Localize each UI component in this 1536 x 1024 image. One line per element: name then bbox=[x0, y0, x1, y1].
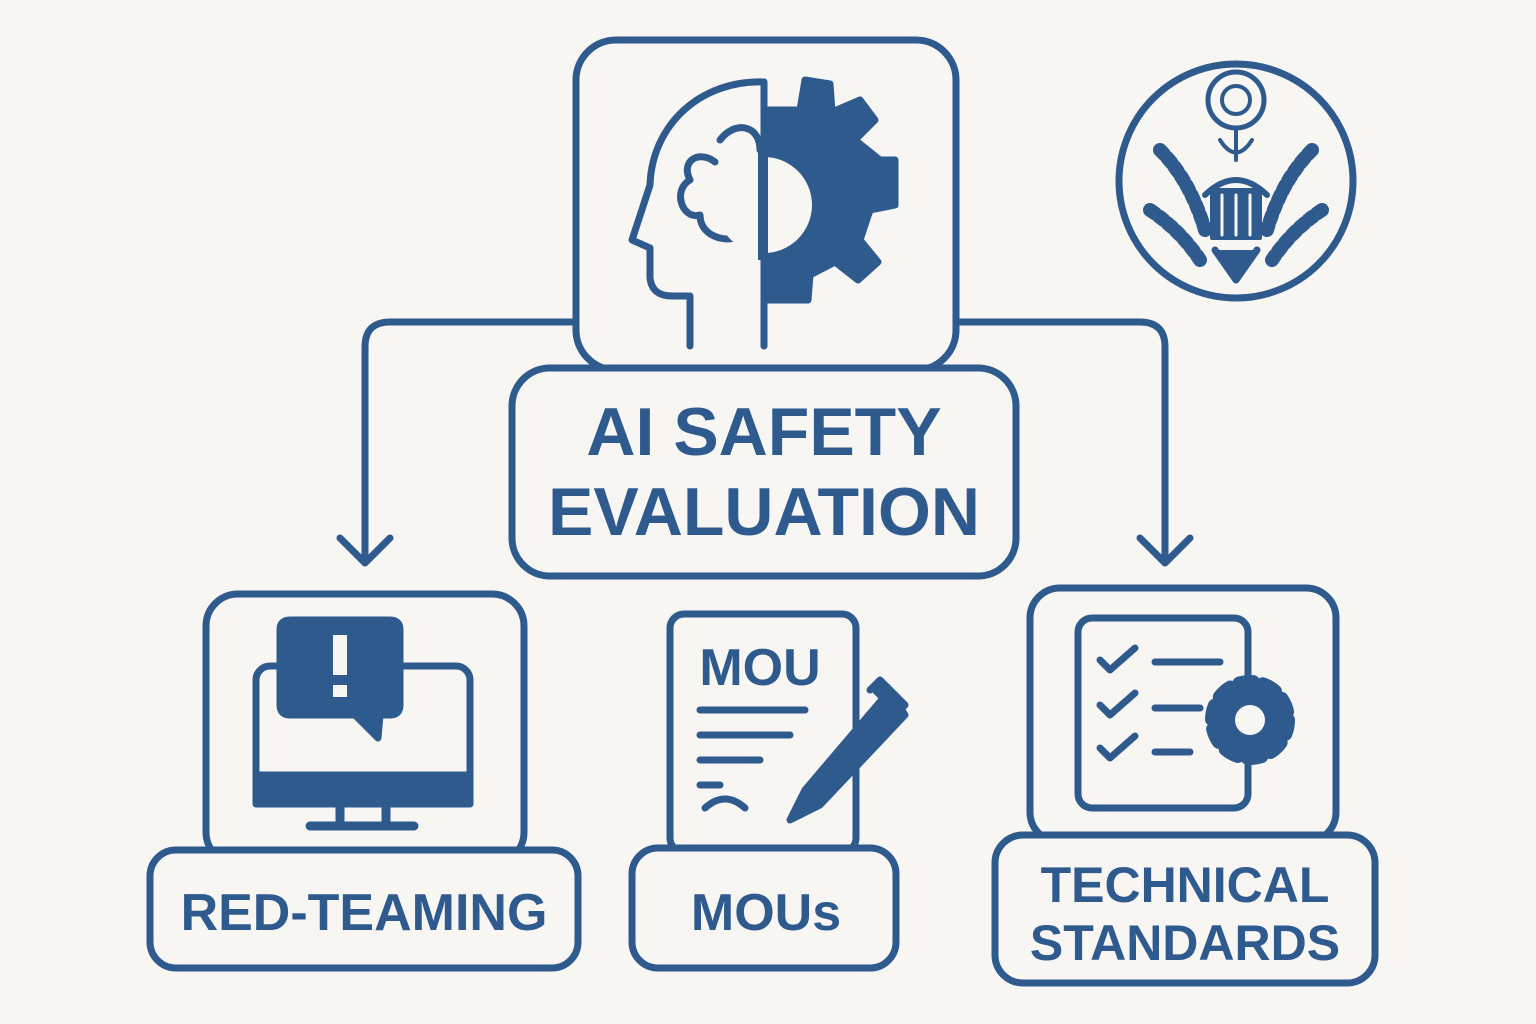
panel: technical standards icon box bbox=[1030, 588, 1336, 842]
icon: head with gear bbox=[632, 80, 895, 346]
panel: title label bbox=[512, 368, 1016, 576]
title line 2: EVALUATION bbox=[548, 474, 980, 550]
title: AI SAFETY bbox=[586, 394, 942, 470]
panel: top icon box bbox=[576, 40, 956, 370]
panel: technical standards label: STANDARDS bbox=[1030, 915, 1340, 971]
icon: pen bbox=[790, 680, 905, 820]
arrow: left branch bbox=[340, 322, 576, 563]
panel: red-teaming icon box bbox=[206, 594, 524, 864]
icon: monitor with alert bbox=[256, 620, 470, 826]
seal emblem bbox=[1119, 64, 1353, 298]
arrow: right branch bbox=[956, 322, 1190, 563]
panel: MOUs label: MOUs bbox=[691, 884, 841, 942]
icon: checklist with gear bbox=[1078, 618, 1288, 808]
panel: technical standards label bbox=[995, 835, 1375, 983]
panel: red-teaming label: RED-TEAMING bbox=[181, 884, 547, 942]
panel: red-teaming label bbox=[150, 850, 578, 968]
panel: technical standards label: TECHNICAL bbox=[1041, 857, 1329, 913]
panel: MOU document bbox=[670, 614, 905, 852]
panel: MOUs label bbox=[632, 848, 896, 968]
panel: MOU document: MOU bbox=[699, 639, 821, 697]
